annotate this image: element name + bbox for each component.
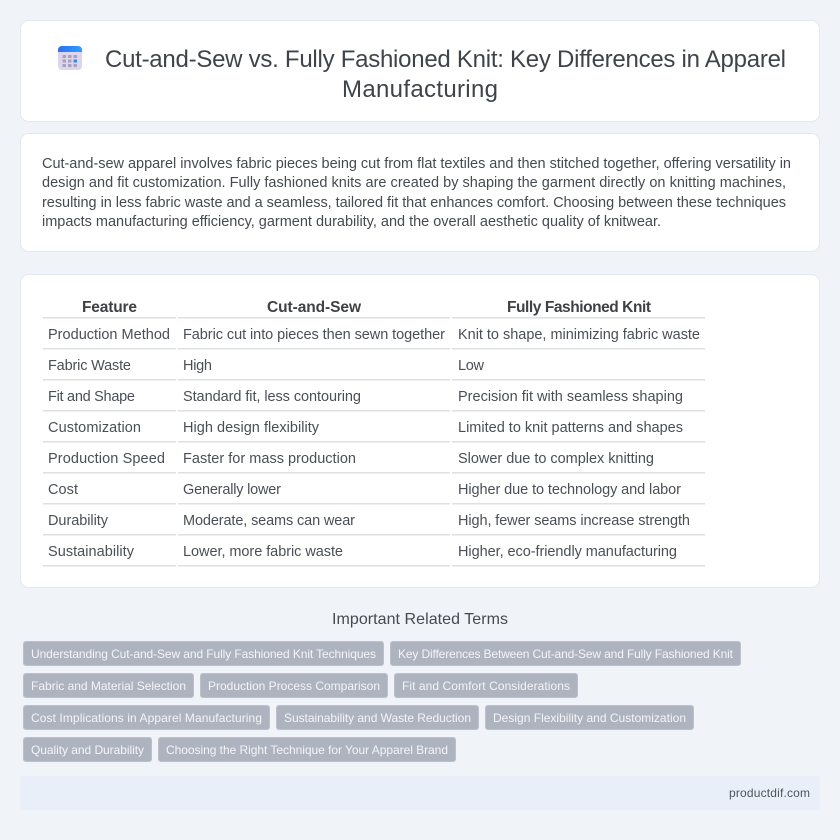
table header: Feature [82, 299, 137, 316]
table header [43, 299, 705, 318]
table row: production speed [43, 451, 705, 474]
footer: site name: productdif.com [729, 786, 810, 800]
heading: important related terms: Important Related Terms [332, 611, 508, 628]
icon: calendar [58, 46, 82, 70]
table row: fit and shape: Fit and Shape [48, 389, 135, 405]
table row: cost: Higher due to technology and labor [458, 482, 681, 498]
table row: fabric waste: Low [458, 358, 485, 374]
table row: customization: High design flexibility [183, 420, 320, 436]
title: Manufacturing [342, 76, 498, 103]
tags: related terms: Sustainability and Waste Reduction [284, 711, 471, 725]
tags: related terms: Choosing the Right Technique for Your Apparel Brand [166, 743, 448, 757]
table row: sustainability: Sustainability [48, 544, 135, 560]
table row: production method: Fabric cut into pieces then sewn together [183, 327, 445, 343]
panel: comparison table [20, 274, 820, 588]
text block: introduction: impacts manufacturing efficiency, garment durability, and the overall aesthetic quality of knitwear. [42, 214, 661, 230]
table row: durability: High, fewer seams increase strength [458, 513, 690, 529]
table row: sustainability: Higher, eco-friendly manufacturing [458, 544, 677, 560]
table row: customization: Customization [48, 420, 141, 436]
table header: Cut-and-Sew [267, 299, 362, 316]
table row: fit and shape [43, 389, 705, 412]
table row: production method: Production Method [48, 327, 170, 343]
table row: production speed: Slower due to complex knitting [458, 451, 654, 467]
table row: fit and shape: Precision fit with seamless shaping [458, 389, 683, 405]
tags: related terms: Quality and Durability [31, 743, 144, 757]
title: Cut-and-Sew vs. Fully Fashioned Knit: Key Differences in Apparel [105, 46, 786, 73]
table row: fit and shape: Standard fit, less contouring [183, 389, 361, 405]
panel: introduction [20, 134, 820, 252]
table row: durability: Durability [48, 513, 109, 529]
table row: fabric waste: Fabric Waste [48, 358, 131, 374]
text block: introduction [42, 156, 791, 230]
tags: related terms: Understanding Cut-and-Sew and Fully Fashioned Knit Techniques [31, 647, 376, 661]
tags: related terms: Design Flexibility and Customization [493, 711, 686, 725]
title [105, 46, 786, 103]
tags: related terms: Fit and Comfort Considerations [402, 679, 570, 693]
table row: production speed: Production Speed [48, 451, 165, 467]
tags: related terms: Fabric and Material Selection [31, 679, 186, 693]
table row: sustainability [43, 544, 705, 566]
table row: cost [43, 482, 705, 504]
footer bar [20, 776, 820, 810]
tags: related terms: Key Differences Between Cut-and-Sew and Fully Fashioned Knit [398, 647, 734, 661]
table row: durability [43, 513, 705, 536]
table row: fabric waste: High [183, 358, 212, 374]
table row: production method [43, 327, 705, 350]
tags: related terms [24, 642, 740, 762]
text block: introduction: Cut-and-sew apparel involves fabric pieces being cut from flat textiles and then stitched together, offering versatility in [42, 156, 791, 172]
tags: related terms: Production Process Comparison [208, 679, 380, 693]
table row: durability: Moderate, seams can wear [183, 513, 355, 529]
table row: cost: Generally lower [183, 482, 281, 498]
table row: customization: Limited to knit patterns and shapes [458, 420, 683, 436]
table row: cost: Cost [48, 482, 78, 498]
table row: production method: Knit to shape, minimizing fabric waste [458, 327, 700, 343]
table row: fabric waste [43, 358, 705, 380]
text block: introduction: design and fit customization. Fully fashioned knits are created by shaping the garment directly on knitting machines, [42, 175, 786, 191]
panel: title header [20, 20, 820, 122]
table header: Fully Fashioned Knit [507, 299, 651, 316]
tags: related terms: Cost Implications in Apparel Manufacturing [31, 711, 262, 725]
table row: sustainability: Lower, more fabric waste [183, 544, 343, 560]
table row: production speed: Faster for mass production [183, 451, 356, 467]
text block: introduction: resulting in less fabric waste and a seamless, tailored fit that enhances comfort. Choosing between these techniques [42, 195, 786, 211]
table row: customization [43, 420, 705, 442]
